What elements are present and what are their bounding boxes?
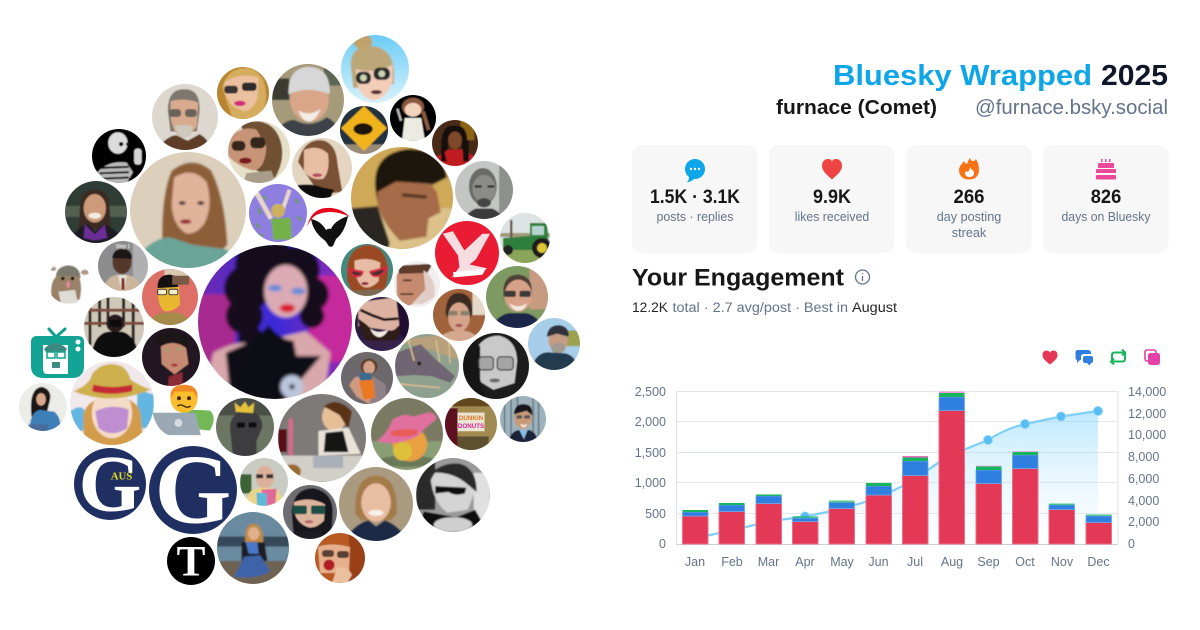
- card: likes received: [769, 145, 894, 253]
- profile name and handle: furnace (Comet): [776, 97, 937, 119]
- avatar: skeleton thumbs up: [92, 129, 146, 183]
- stat cards: [632, 145, 1168, 253]
- left axis labels: 500: [645, 507, 666, 521]
- avatar: green tractor: [500, 213, 550, 263]
- heading: Your Engagement: Your Engagement: [632, 264, 844, 292]
- avatar: smiling blonde woman in navy: [339, 467, 413, 541]
- bars: replies in blue: [682, 397, 1112, 522]
- avatar: main woman with curly black hair: [198, 245, 352, 399]
- avatar: woman with long dark hair in blue: [14, 378, 72, 436]
- avatar: red circle with white eagle: [435, 221, 499, 285]
- icon: chat bubble: [685, 159, 705, 182]
- card: posts and replies: [632, 145, 758, 253]
- month labels: May: [830, 555, 855, 569]
- icon: reposts arrows: [1111, 350, 1125, 364]
- month labels: Feb: [721, 555, 743, 569]
- avatar: straw hat with mask: [62, 353, 162, 453]
- avatar: New York Times T logo: T: [177, 538, 206, 585]
- avatar: Guardian Australia G logo: G: [79, 440, 141, 529]
- engagement summary line: August: [852, 300, 897, 316]
- avatar: Mother Gothel dark curly hair: [136, 322, 206, 392]
- avatar: cartoon chef girl: [390, 95, 436, 141]
- avatar: woman with green glasses: [283, 485, 337, 539]
- avatar: woman with orange sofa and glasses: [433, 289, 485, 341]
- engagement summary line: 12.2K: [632, 300, 669, 316]
- month labels: Sep: [977, 555, 1000, 569]
- right axis labels: 2,000: [1128, 515, 1159, 529]
- avatar: wombat road sign: [340, 106, 388, 154]
- avatar: Dunkin Donuts sign: DUNKIN: [459, 415, 484, 422]
- avatar: possum with hat and newspaper: [50, 264, 89, 304]
- avatar: black and white person with sunglasses: [416, 458, 490, 532]
- icon: info: [856, 270, 870, 284]
- chart: monthly engagement stacked bars and cumulative line: [635, 385, 1166, 569]
- avatar: woman in blue dress on coast: [210, 505, 296, 591]
- avatar: man with rainbow scarf: [235, 453, 293, 511]
- avatar: woman holding orange bag: [341, 352, 393, 404]
- title: Bluesky Wrapped 2025: 2025: [1101, 60, 1168, 92]
- left axis labels: [635, 385, 666, 551]
- avatar: pink hat on peach render: [371, 398, 443, 470]
- avatar cluster: [14, 28, 585, 591]
- avatar: smiling person in red shirt: [432, 120, 478, 166]
- avatar: cartoon woman with bun and glasses: [341, 35, 409, 103]
- avatar: black man in suit vintage: Step 1: [116, 244, 130, 250]
- icon: quotes stacked squares: [1145, 350, 1160, 365]
- left axis labels: 2,500: [635, 385, 666, 399]
- month labels: Jan: [685, 555, 705, 569]
- avatar: purple art with green figure: [249, 184, 307, 242]
- avatar: smiling man in suit: [500, 396, 546, 442]
- avatar: smiling man with glasses and navy shirt: [486, 266, 548, 328]
- avatar: man in grey beanie: [272, 64, 344, 136]
- month labels: Apr: [795, 555, 815, 569]
- month labels: Oct: [1015, 555, 1035, 569]
- card: likes received: 9.9K: [813, 187, 851, 208]
- month labels: Nov: [1051, 555, 1074, 569]
- card: day posting streak: 266: [954, 187, 984, 208]
- avatar: cartoon man yellow skin on salmon: [136, 263, 204, 331]
- card: days on Bluesky: [1043, 145, 1168, 253]
- profile name and handle: [776, 97, 1168, 119]
- icon: teal TV character: [31, 329, 84, 378]
- icon: birthday cake: [1096, 159, 1116, 180]
- left axis labels: 2,000: [635, 415, 666, 429]
- avatar: Guardian Australia G logo: AUS: [111, 471, 132, 483]
- engagement summary line: [632, 300, 897, 316]
- month labels: Mar: [758, 555, 779, 569]
- avatar: gorilla with crown and sunglasses: [210, 392, 280, 462]
- title: Bluesky Wrapped 2025: Bluesky Wrapped: [833, 60, 1092, 92]
- left axis labels: 1,000: [635, 476, 666, 490]
- avatar: bearded man with glasses smiling: [355, 297, 409, 351]
- avatar: Dunkin Donuts sign: [445, 398, 497, 450]
- avatar: bald man black and white: [455, 161, 513, 219]
- right axis labels: 6,000: [1128, 472, 1159, 486]
- avatar: Dunkin Donuts sign: DONUTS: [458, 423, 484, 430]
- month labels: Jul: [907, 555, 923, 569]
- avatar: man in profile with dark hair: [351, 147, 453, 249]
- right axis labels: 8,000: [1128, 450, 1159, 464]
- avatar: child with candle at table: [278, 394, 366, 482]
- month labels: Aug: [941, 555, 963, 569]
- line markers: [800, 406, 1102, 521]
- avatar: woman with red hair touching lips: [315, 533, 365, 583]
- engagement summary line: total · 2.7 avg/post · Best in: [672, 300, 848, 316]
- cumulative line: [695, 411, 1098, 538]
- avatar: black raven under red arc: [307, 208, 350, 247]
- left axis labels: 0: [659, 537, 666, 551]
- avatar: New York Times T logo: [162, 532, 220, 590]
- right axis labels: 10,000: [1128, 428, 1166, 442]
- avatar: woman with curly hair and glasses: [228, 121, 290, 183]
- right axis labels: 4,000: [1128, 494, 1159, 508]
- chart gridlines: [676, 391, 1118, 544]
- month labels: Jun: [868, 555, 889, 569]
- right axis labels: [1128, 385, 1166, 551]
- card: day posting streak: day posting: [937, 210, 1001, 224]
- avatar: woman with red heart glasses: [341, 244, 393, 296]
- card: posts and replies: posts · replies: [656, 210, 734, 224]
- left axis labels: 1,500: [635, 446, 666, 460]
- chart legend icons: [1042, 350, 1160, 366]
- avatar: Guardian G logo: G: [155, 436, 231, 545]
- icon: likes heart: [1042, 350, 1058, 364]
- card: likes received: likes received: [795, 210, 869, 224]
- avatar: woman black and white with glasses: [463, 333, 529, 399]
- bars: quotes in pink: [902, 392, 1038, 466]
- cumulative area: [695, 411, 1098, 544]
- month labels: Dec: [1087, 555, 1110, 569]
- month labels: [685, 555, 1110, 569]
- avatar: man with hand on cheek: [394, 261, 440, 307]
- profile name and handle: @furnace.bsky.social: [975, 97, 1168, 119]
- icon: replies bubbles: [1076, 350, 1093, 366]
- avatar: black man in suit vintage: [98, 241, 148, 291]
- icon: heart: [822, 159, 842, 180]
- avatar: photographer in bookshelf room: [78, 291, 150, 363]
- card: days on Bluesky: 826: [1091, 187, 1121, 208]
- right axis labels: 14,000: [1128, 385, 1166, 399]
- card: posts and replies: 1.5K · 3.1K: [650, 187, 740, 208]
- icon: flame: [959, 158, 979, 180]
- bars: likes in red: [682, 410, 1112, 544]
- card: day posting streak: [906, 145, 1032, 253]
- avatar: woman with long hair: [292, 138, 352, 198]
- right axis labels: 0: [1128, 537, 1135, 551]
- card: days on Bluesky: days on Bluesky: [1062, 210, 1151, 224]
- card: day posting streak: streak: [952, 226, 987, 240]
- avatar: blonde woman with glasses: [217, 67, 269, 119]
- bars: reposts in green: [682, 393, 1112, 518]
- icon: worried man with laptop emoji: [153, 385, 214, 435]
- right axis labels: 12,000: [1128, 407, 1166, 421]
- avatar: woman with reddish hair and teal top: [130, 152, 246, 268]
- avatar: man with cap and blue sky: [528, 318, 580, 370]
- avatar: platypus: [395, 334, 459, 398]
- avatar: man with grey hair and glasses: [152, 84, 218, 150]
- avatar: smiling woman on dark background: [65, 181, 127, 243]
